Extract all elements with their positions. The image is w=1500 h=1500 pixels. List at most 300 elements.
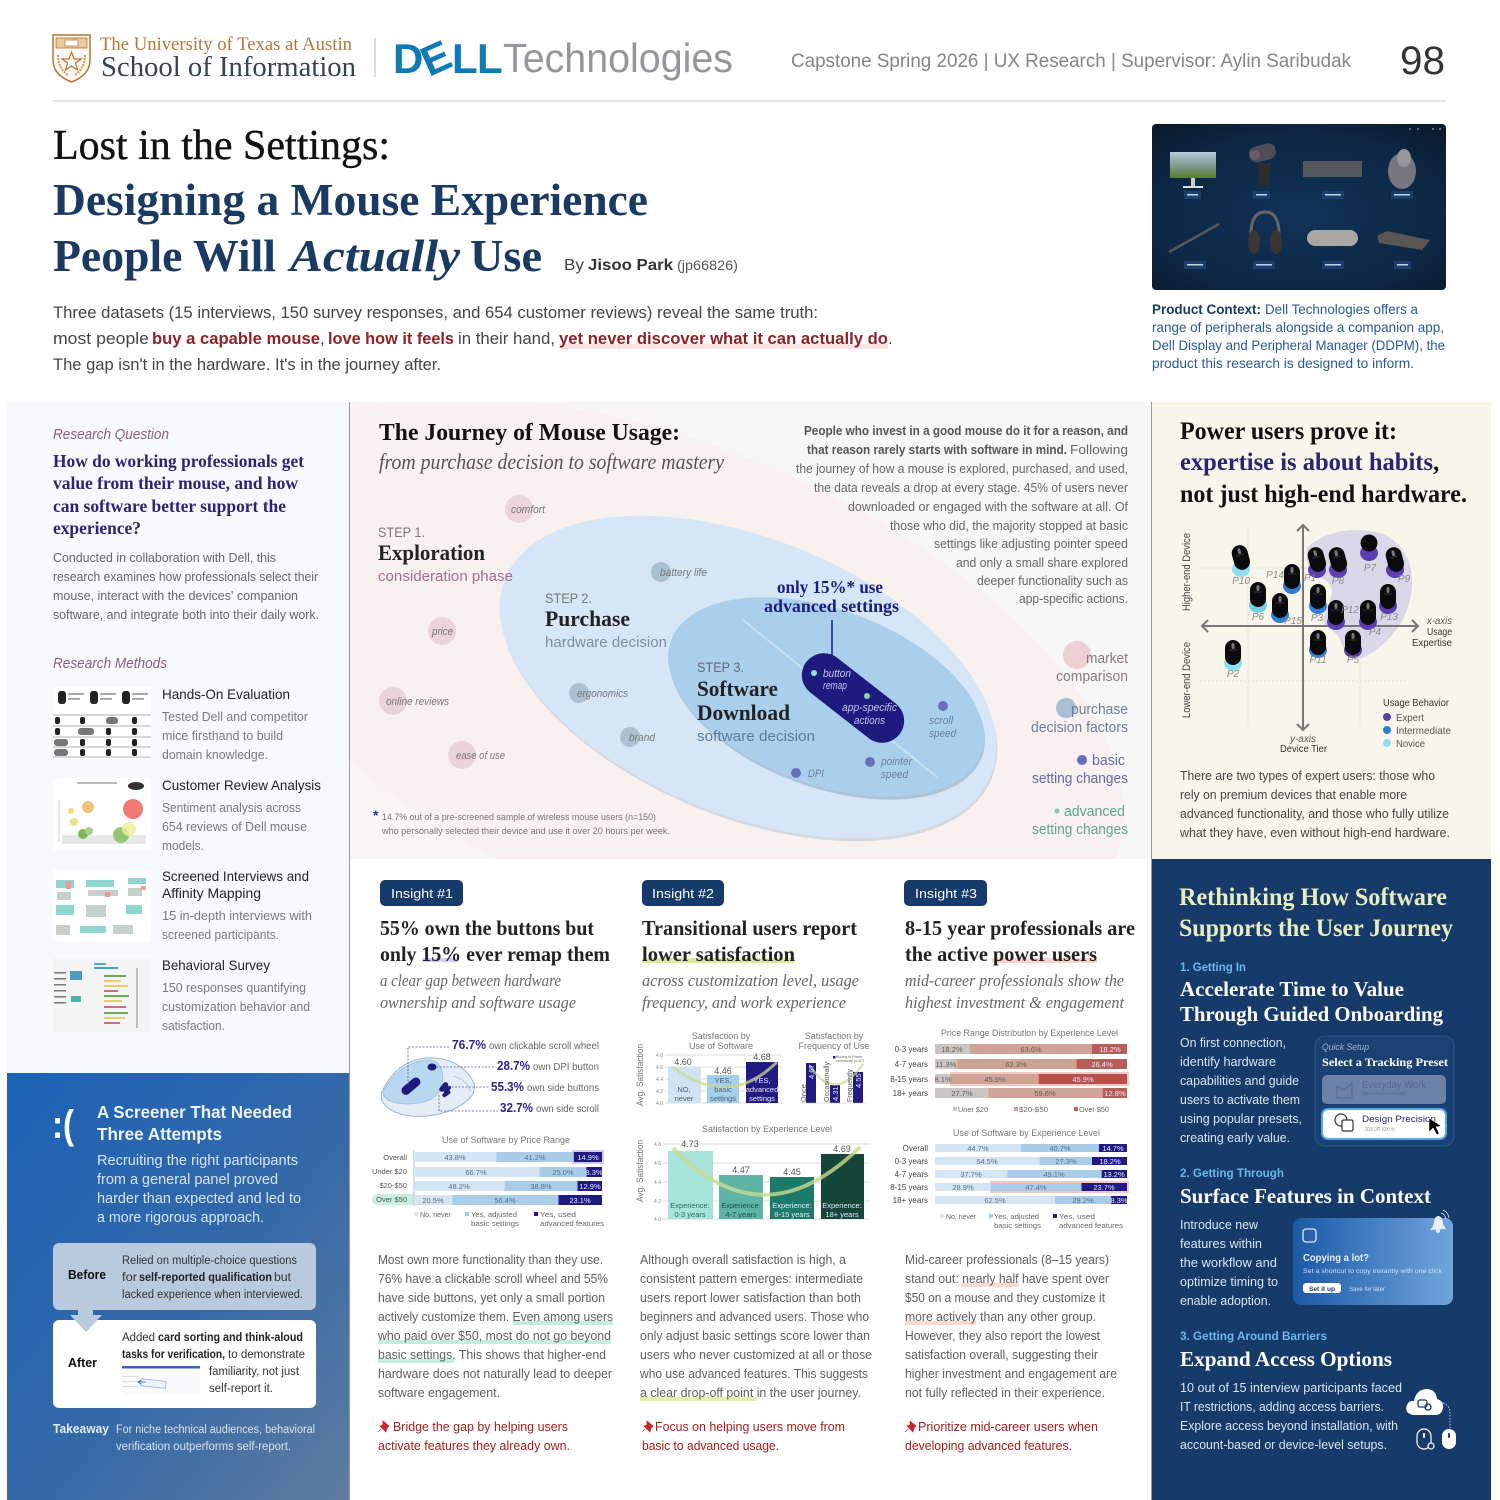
marker P3 (1309, 584, 1327, 614)
marker P10 (1230, 543, 1252, 577)
step 1 label: Exploration (378, 540, 485, 565)
panel: research question and methods (7, 402, 349, 1073)
marker P7 (1360, 534, 1378, 561)
chart: satisfaction by experience level: 4.47 (732, 1165, 750, 1175)
chart: satisfaction by experience level (635, 1124, 870, 1223)
product context text: product this research is designed to inform. (1152, 355, 1414, 371)
icon: cursor (1429, 1118, 1441, 1135)
chart: satisfaction by use of software: 4.0 (656, 1101, 663, 1107)
axis captions: Usage (1427, 627, 1452, 638)
power users heading: Power users prove it: (1180, 418, 1397, 445)
preset: everyday work: Everyday Work (1362, 1080, 1427, 1091)
participant labels: P9 (1398, 574, 1411, 585)
intro text: yet never discover what it can actually do (559, 329, 888, 348)
power users heading: , (1433, 449, 1439, 476)
journey description: the journey of how a mouse is explored, purchased, and used, (796, 461, 1128, 476)
advanced settings items: actions (854, 715, 885, 727)
product context text: Product Context: (1152, 301, 1261, 317)
UT name: The University of Texas at Austin (100, 34, 352, 55)
screener description (97, 1153, 301, 1226)
insight 3 body: stand out: nearly half have spent over (905, 1271, 1110, 1286)
participant labels: P10 (1232, 576, 1250, 587)
power users paragraph: There are two types of expert users: those who (1180, 768, 1435, 783)
chart: use of software by price range: 23.1% (569, 1196, 591, 1205)
insight 1 (372, 880, 613, 1453)
method: screened interviews (53, 868, 312, 942)
subheading: ownership and software usage (380, 993, 576, 1012)
step 2 label (545, 590, 667, 651)
notification card: Set a shortcut to copy instantly with one click (1303, 1268, 1443, 1275)
usage behavior legend: Novice (1396, 738, 1425, 750)
chart: satisfaction by experience level: Experience: (822, 1201, 862, 1210)
section 2: Introduce new (1180, 1217, 1259, 1232)
usage behavior legend: Intermediate (1396, 725, 1451, 737)
method: hands-on evaluation: mice firsthand to build (162, 728, 283, 743)
participant labels: P8 (1332, 576, 1345, 587)
chart: price range distribution: 45.9% (984, 1075, 1006, 1084)
panel: journey of mouse usage (350, 402, 1128, 859)
stats: 32.7% (500, 1101, 533, 1115)
screener description: from a general panel proved (97, 1172, 278, 1188)
after box: to demonstrate (228, 1349, 305, 1361)
product context text: Dell Technologies offers a (1265, 301, 1418, 317)
legend: advanced features (540, 1219, 604, 1228)
insight 2 body: users who never customized at all or those (640, 1347, 872, 1362)
method: screened interviews: screened participants. (162, 927, 279, 942)
insight 3 body: higher investment and engagement are (905, 1366, 1117, 1381)
chart: price range distribution: 62.3% (1005, 1060, 1027, 1069)
chart: satisfaction by frequency of use: Frequency of Use (798, 1041, 870, 1051)
screener description: harder than expected and led to (97, 1191, 301, 1207)
stats: own clickable scroll wheel (489, 1041, 599, 1052)
title: Designing a Mouse Experience (53, 175, 648, 225)
stats: 76.7% (452, 1038, 486, 1052)
chart: use of software by price range: 41.2% (524, 1153, 546, 1162)
chart: satisfaction by use of software: 4.60 (674, 1057, 692, 1067)
thumbnail: sentiment bubble chart (53, 778, 151, 850)
chart: satisfaction by experience level: 4.45 (783, 1167, 801, 1177)
research question: How do working professionals get (53, 451, 304, 471)
heading (905, 916, 1135, 966)
insight 2 body: users report lower satisfaction than both (640, 1290, 861, 1305)
chart: satisfaction by experience level: 18+ years (825, 1210, 859, 1219)
notification card: Set it up (1309, 1286, 1335, 1293)
chart: use of software by price range: 12.9% (579, 1182, 601, 1191)
icon: keyboard (1303, 161, 1362, 177)
section 2 (1180, 1168, 1453, 1308)
title: Actually (287, 231, 461, 281)
section 2: Surface Features in Context (1180, 1184, 1431, 1208)
tiny legend (833, 1055, 864, 1063)
journey heading (379, 420, 724, 474)
insight 1 body: have side buttons, yet only a small portion (378, 1290, 605, 1305)
marker P13 (1379, 584, 1397, 614)
icon: speakerphone (1307, 230, 1358, 246)
section 1 (1180, 962, 1454, 1146)
legend: No, never (946, 1212, 976, 1221)
chart: use of software by price range: 48.2% (448, 1182, 470, 1191)
participant labels (1227, 563, 1411, 680)
chart: use of software by experience level: Use of Software by Experience Level (953, 1128, 1100, 1138)
subheading: a clear gap between hardware (380, 971, 561, 990)
mouse feature diagram (381, 1038, 599, 1117)
product context text: Dell Display and Peripheral Manager (DDPM), the (1152, 337, 1445, 353)
icon: pin (642, 1421, 653, 1432)
chart: use of software by experience level: 8.3% (1110, 1196, 1128, 1205)
research question (53, 451, 304, 538)
screener description: a more rigorous approach. (97, 1210, 264, 1226)
chart: price range distribution: 18.2% (941, 1045, 963, 1054)
chart: use of software by price range: $20-$50 (379, 1181, 407, 1190)
intro text: Three datasets (15 interviews, 150 survey responses, and 654 customer reviews) reveal the same truth: (53, 303, 818, 322)
power users paragraph: what they have, even without high-end hardware. (1179, 825, 1450, 840)
y axis side labels: Lower-end Device (1181, 642, 1193, 718)
chart: satisfaction by frequency of use: Frequently (845, 1069, 854, 1102)
chart: satisfaction by frequency of use: Satisfaction by (805, 1031, 864, 1041)
method: screened interviews: Screened Interviews and (162, 868, 309, 884)
axis captions (1280, 616, 1452, 755)
chart: satisfaction by frequency of use: 4.55 (854, 1073, 863, 1088)
step 3 label: Download (697, 700, 790, 725)
marker P12 (1327, 600, 1345, 630)
chart: satisfaction by use of software: Use of Software (689, 1041, 753, 1051)
callout: only 15% (764, 577, 899, 616)
badge (642, 880, 724, 906)
marker P1 (1306, 545, 1328, 578)
research description: mouse, interact with the devices' companion (53, 588, 298, 603)
legend: basic settings (994, 1221, 1041, 1230)
journey legend: market (1086, 651, 1128, 667)
chart: price range distribution: 18.2% (1099, 1045, 1121, 1054)
notification card: Copying a lot? (1303, 1252, 1369, 1264)
chart: use of software by experience level: 40.7% (1049, 1144, 1071, 1153)
insight 2 (635, 880, 872, 1453)
consideration factors: ease of use (456, 750, 505, 762)
basic settings: speed (881, 769, 909, 781)
icon: dock (1377, 231, 1430, 250)
participant labels: P11 (1309, 655, 1327, 666)
thumbnail: comparison grid (53, 687, 151, 758)
byline (564, 257, 738, 274)
consideration factors (379, 495, 546, 769)
axis captions: Device Tier (1280, 744, 1328, 755)
basic settings: speed (929, 728, 957, 740)
journey legend: decision factors (1031, 720, 1128, 736)
after box: self-report it. (209, 1383, 273, 1395)
screener heading (97, 1102, 292, 1144)
device labels (1184, 191, 1413, 269)
chart: use of software by experience level (890, 1128, 1129, 1230)
chart: satisfaction by use of software: 4.68 (753, 1052, 771, 1062)
step 1 label: consideration phase (378, 569, 513, 585)
insight 2 recommendation: basic to advanced usage. (642, 1438, 779, 1453)
marker P15 (1271, 593, 1289, 623)
marker P4 (1359, 600, 1377, 630)
participant labels: P2 (1227, 669, 1240, 680)
legend: $20-$50 (1019, 1105, 1048, 1114)
icon: stylus (1169, 224, 1219, 252)
basic settings (791, 701, 957, 781)
header logos and meta (53, 31, 1446, 101)
marker P8 (1327, 545, 1349, 578)
journey legend: setting changes (1032, 822, 1128, 838)
chart: use of software by price range: 20.5% (422, 1196, 444, 1205)
chart: use of software by experience level: 54.5% (976, 1157, 998, 1166)
section 3: 10 out of 15 interview participants faced (1180, 1380, 1402, 1395)
method: hands-on evaluation: domain knowledge. (162, 747, 268, 762)
takeaway (53, 1422, 315, 1453)
panel heading (1179, 884, 1453, 942)
participant labels: P6 (1252, 612, 1265, 623)
insight 2 recommendation: Focus on helping users move from (655, 1419, 845, 1434)
purchase factors: ergonomics (577, 688, 628, 700)
chart: price range distribution (890, 1028, 1129, 1114)
insight 2 body (639, 1252, 872, 1401)
chart: use of software by price range: 66.7% (465, 1168, 487, 1177)
tiny legend: community (n=87) (836, 1059, 864, 1063)
chart: price range distribution: 59.6% (1034, 1089, 1056, 1098)
heading: only 15% ever remap them (380, 942, 610, 966)
step 3 label: STEP 3. (697, 659, 744, 675)
screener heading: Three Attempts (97, 1124, 222, 1144)
chart: satisfaction by use of software: 4.8 (656, 1053, 663, 1059)
quick setup card: Select a Tracking Preset (1322, 1055, 1448, 1069)
chart: satisfaction by use of software: NO, (677, 1085, 691, 1094)
intro text: love how it feels (328, 329, 454, 348)
legend: Uner $20 (958, 1105, 988, 1114)
before box: Relied on multiple-choice questions (122, 1255, 297, 1267)
insight 1 body (377, 1252, 613, 1400)
expert region (1307, 530, 1412, 658)
method: customer review analysis: 654 reviews of Dell mouse (162, 819, 307, 834)
section 3: account-based or device-level setups. (1180, 1437, 1387, 1452)
chart: satisfaction by use of software: YES, (753, 1076, 771, 1085)
arrow: before to after (70, 1310, 102, 1332)
badge: Insight #1 (391, 886, 453, 901)
y axis side labels: Higher-end Device (1181, 533, 1193, 611)
chart: satisfaction by use of software: Avg. Satisfaction (635, 1044, 645, 1106)
chart: satisfaction by experience level: Satisfaction by Experience Level (702, 1124, 832, 1134)
journey legend: advanced (1064, 804, 1125, 820)
journey legend (1031, 641, 1128, 838)
usage behavior legend: Usage Behavior (1383, 697, 1449, 709)
section 3: IT restrictions, adding access barriers. (1180, 1399, 1384, 1414)
callout: only 15%: advanced settings (764, 596, 899, 616)
title: Use (470, 231, 542, 281)
chart: use of software by price range (372, 1135, 604, 1228)
participant labels: P1 (1304, 573, 1316, 584)
journey legend: setting changes (1032, 771, 1128, 787)
step 1 label (378, 524, 513, 585)
chart: use of software by experience level: 47.4% (1025, 1183, 1047, 1192)
marker P11 (1309, 630, 1327, 658)
section 1: using popular presets, (1180, 1111, 1302, 1126)
participant labels: P5 (1347, 655, 1360, 666)
chart: use of software by experience level: Overall (903, 1144, 928, 1153)
legend: No, never (420, 1210, 451, 1219)
quadrant chart (1181, 525, 1452, 755)
icon: pin (378, 1421, 389, 1432)
section 3 (1180, 1331, 1456, 1452)
intro text: The gap isn't in the hardware. It's in the journey after. (53, 355, 441, 374)
chart: satisfaction by experience level: 4.8 (654, 1142, 661, 1148)
icon: UT shield (53, 35, 90, 82)
research description: software, and integrate both into their daily work. (53, 607, 319, 622)
section 1: capabilities and guide (1180, 1073, 1299, 1088)
insight 2 body: consistent pattern emerges: intermediate (640, 1271, 863, 1286)
thumbnail: verification task (122, 1366, 200, 1395)
chart: satisfaction by use of software: 4.6 (656, 1065, 663, 1071)
after box: Added (122, 1332, 155, 1344)
chart: satisfaction by experience level: 4-7 years (725, 1210, 757, 1219)
participant labels: P3 (1311, 613, 1324, 624)
heading: lower satisfaction (642, 942, 795, 966)
quick setup card (1315, 1036, 1454, 1146)
method: customer review analysis: Customer Review Analysis (162, 777, 321, 793)
insight 2 body: only adjust basic settings score lower than (640, 1328, 870, 1343)
method: behavioral survey: satisfaction. (162, 1018, 225, 1033)
screener description: Recruiting the right participants (97, 1153, 298, 1169)
footnote (373, 807, 670, 837)
insight 3 recommendation: Prioritize mid-career users when (918, 1419, 1098, 1434)
journey description: app-specific actions. (1019, 591, 1128, 606)
subheading (642, 971, 859, 1012)
heading: 8-15 year professionals are (905, 916, 1135, 940)
legend: Yes, adjusted (994, 1212, 1039, 1221)
legend: advanced features (1059, 1221, 1123, 1230)
chart: price range distribution: 18+ years (893, 1089, 928, 1098)
journey description: and only a small share explored (956, 555, 1128, 570)
chart: use of software by price range: 25.0% (552, 1168, 574, 1177)
section 1: 1. Getting In (1180, 962, 1246, 974)
journey description: downloaded or engaged with the software at all. Of (848, 499, 1128, 514)
stats: 28.7% (497, 1059, 530, 1073)
power users paragraph (1179, 768, 1450, 840)
byline: (jp66826) (677, 258, 738, 273)
research description: Conducted in collaboration with Dell, this (53, 550, 276, 565)
UT name: School of Information (101, 52, 356, 83)
chart: satisfaction by use of software: never (675, 1094, 694, 1103)
icon: mouse (381, 1058, 475, 1117)
subheading (380, 971, 576, 1012)
after box (53, 1320, 316, 1408)
legend: Yes, used (540, 1210, 576, 1219)
insight 1 recommendation: activate features they already own. (378, 1438, 570, 1453)
chart: price range distribution: Price Range Distribution by Experience Level (941, 1028, 1118, 1038)
subheading (905, 971, 1125, 1012)
intro text: , (320, 329, 325, 348)
icon: bell (1430, 1210, 1449, 1233)
journey description: People who invest in a good mouse do it for a reason, and (804, 423, 1128, 438)
method: hands-on evaluation: Tested Dell and competitor (162, 709, 309, 724)
stats (452, 1038, 599, 1115)
chart: satisfaction by use of software: 4.4 (656, 1077, 663, 1083)
UT name (100, 34, 356, 83)
callout line (831, 620, 833, 660)
icon: headset (1248, 212, 1282, 254)
chart: satisfaction by experience level: 0-3 years (674, 1210, 706, 1219)
axes (1202, 525, 1418, 730)
method: behavioral survey: customization behavior and (162, 999, 310, 1014)
chart: use of software by experience level: 44.7% (967, 1144, 989, 1153)
section 1: On first connection, (1180, 1035, 1286, 1050)
research question label: Research Question (53, 427, 169, 443)
legend: Yes, adjusted (471, 1210, 517, 1219)
legend: basic settings (471, 1219, 519, 1228)
chart: satisfaction by use of software: basic (714, 1085, 732, 1094)
section 1: Through Guided Onboarding (1180, 1002, 1443, 1026)
heading (380, 916, 610, 966)
power users paragraph: rely on premium devices that enable more (1180, 787, 1407, 802)
preset: design precision (1322, 1109, 1446, 1139)
intro text: buy a capable mouse (152, 329, 320, 348)
icon: pin (905, 1421, 916, 1432)
badge: Insight #3 (915, 886, 977, 901)
usage behavior legend (1383, 697, 1451, 750)
journey heading: from purchase decision to software mastery (379, 449, 724, 474)
subheading: highest investment & engagement (905, 993, 1125, 1012)
icon: mouse (1388, 149, 1416, 189)
heading: the active power users (905, 942, 1097, 966)
step 3 label: Software (697, 676, 778, 701)
chart: use of software by price range: 14.9% (577, 1153, 599, 1162)
takeaway: verification outperforms self-report. (116, 1441, 291, 1453)
participant labels: P4 (1369, 627, 1382, 638)
journey description: those who did, the majority stopped at basic (890, 518, 1128, 533)
chart: use of software by price range: Use of Software by Price Range (442, 1135, 570, 1145)
chart: use of software by experience level: 14.7% (1102, 1144, 1124, 1153)
Dell Technologies logo (393, 31, 733, 85)
method: hands-on evaluation: Hands-On Evaluation (162, 686, 290, 702)
product image: Dell peripherals (1152, 124, 1446, 290)
research methods label: Research Methods (53, 656, 167, 672)
chart: use of software by price range: 38.8% (530, 1182, 552, 1191)
chart: use of software by experience level: 18+ years (893, 1196, 928, 1205)
badge: Insight #2 (652, 886, 714, 901)
insight 3 body: more actively than any other group. (905, 1309, 1096, 1324)
insight 1 body: actively customize them. Even among users (378, 1309, 613, 1324)
section 1: identify hardware (1180, 1054, 1276, 1069)
chart: satisfaction by use of software: settings (710, 1094, 736, 1103)
insight 2 body: Although overall satisfaction is high, a (640, 1252, 847, 1267)
chart: price range distribution: 63.6% (1020, 1045, 1042, 1054)
insight 1 body: basic settings. This shows that higher-end (378, 1347, 606, 1362)
method: behavioral survey: Behavioral Survey (162, 957, 270, 973)
subheading: frequency, and work experience (642, 993, 846, 1012)
chart: use of software by experience level: 49.1% (1043, 1170, 1065, 1179)
chart: use of software by experience level: 29.2% (1072, 1196, 1094, 1205)
chart: price range distribution: 0-3 years (895, 1045, 928, 1054)
title: Lost in the Settings: (53, 123, 390, 169)
chart: satisfaction by frequency of use: Occasionally (822, 1062, 831, 1102)
chart: use of software by price range: 43.8% (444, 1153, 466, 1162)
insight 3 body: Mid-career professionals (8–15 years) (905, 1252, 1109, 1267)
journey description: Following (1070, 442, 1128, 457)
method: behavioral survey (53, 957, 310, 1033)
journey description: the data reveals a drop at every stage. 45% of users never (814, 480, 1129, 495)
heading (642, 916, 857, 966)
journey legend: basic (1092, 753, 1125, 769)
marker P14 (1283, 564, 1301, 594)
chart: price range distribution: 8-15 years (890, 1075, 928, 1084)
basic settings: scroll (929, 715, 954, 727)
research question: can software better support the (53, 496, 286, 516)
participant labels: P7 (1364, 563, 1377, 574)
chart: satisfaction by experience level: 4.73 (681, 1139, 699, 1149)
basic settings: pointer (880, 756, 913, 768)
section 3: Expand Access Options (1180, 1347, 1392, 1371)
chart: price range distribution: 8.1% (934, 1075, 952, 1084)
